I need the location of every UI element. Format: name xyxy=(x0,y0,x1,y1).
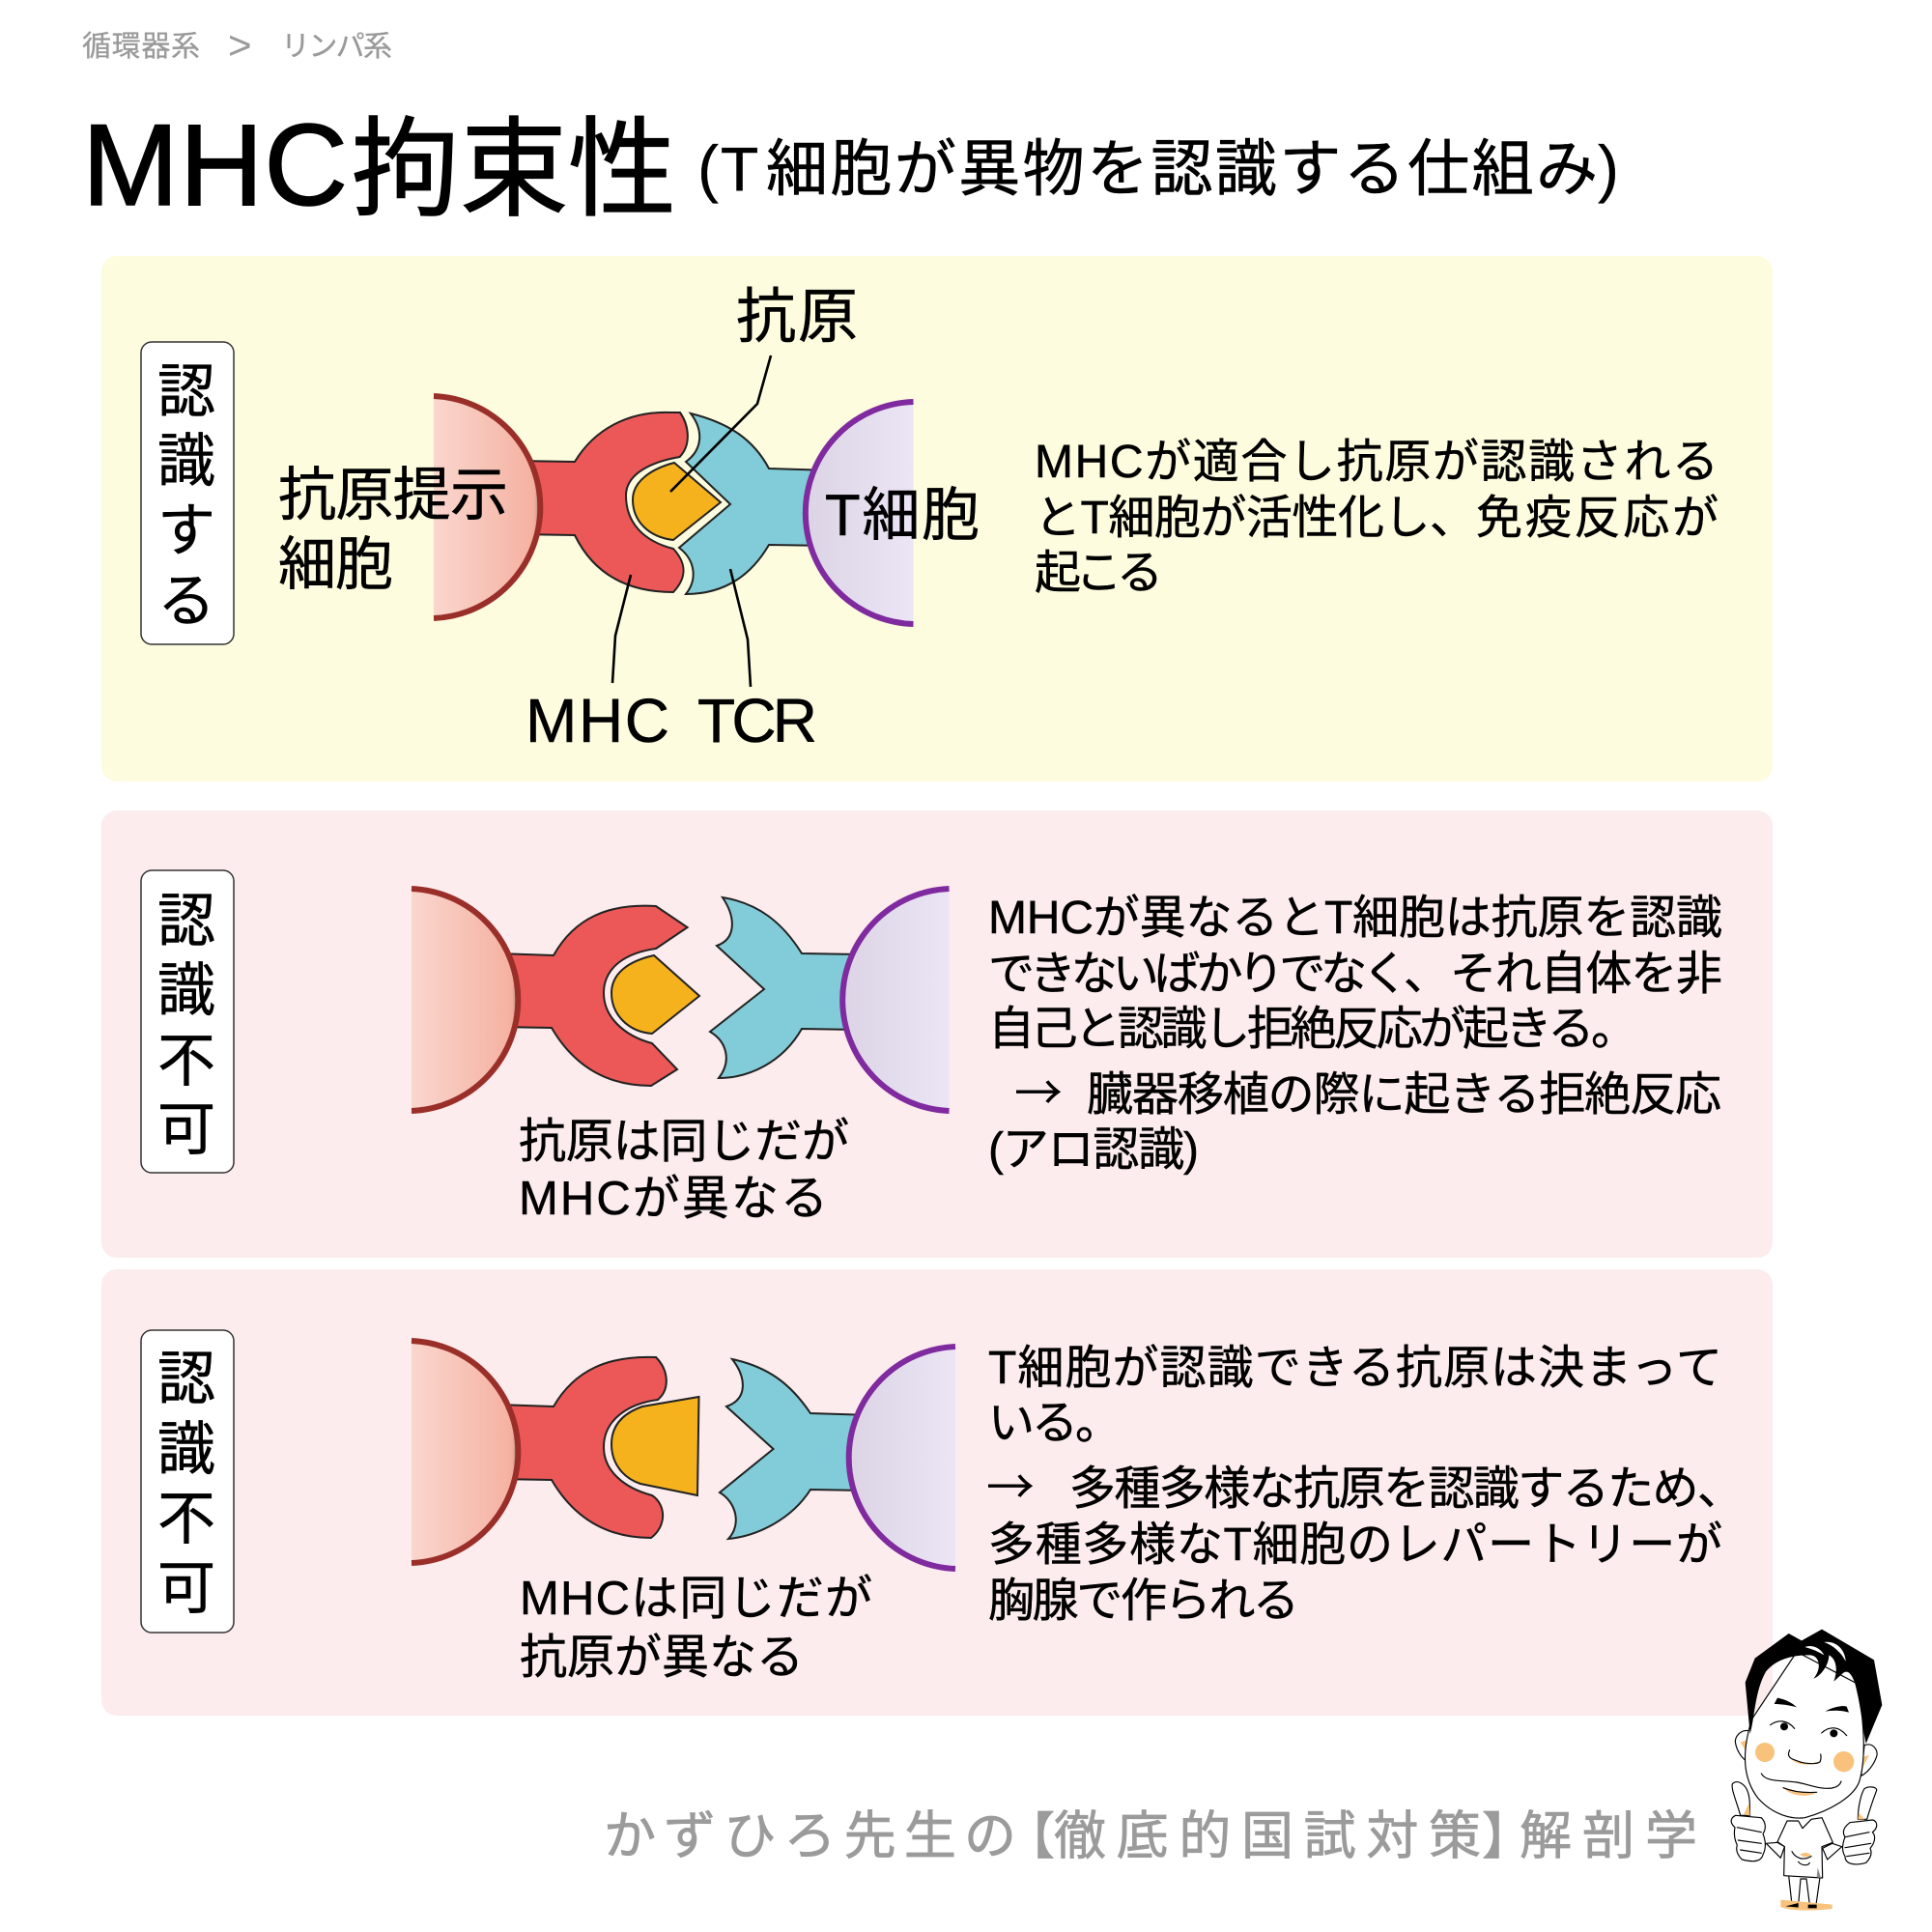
mascot ears xyxy=(1735,1730,1877,1776)
label: 認識する: 識 xyxy=(157,429,215,494)
label: 認識する xyxy=(141,342,234,644)
panel: different MHC xyxy=(101,810,1773,1258)
caption: 抗原は同じだが xyxy=(519,1116,849,1168)
caption xyxy=(519,1116,849,1225)
label: 認識不可: 不 xyxy=(157,1487,215,1551)
caption: MHCは同じだが xyxy=(520,1573,872,1625)
label: antigen presenting cell xyxy=(278,463,508,597)
mascot body xyxy=(1766,1818,1842,1911)
description: いる。 xyxy=(988,1398,1122,1449)
label: 認識不可 xyxy=(141,870,234,1173)
description: できないばかりでなく、 xyxy=(988,949,1450,1000)
subtitle: ( xyxy=(697,132,719,204)
label: MHC: MHC xyxy=(526,686,669,755)
diagram: mismatch of antigen xyxy=(412,1341,955,1569)
title kanji: 拘束性 xyxy=(352,109,676,230)
footer credit: かずひろ先生の xyxy=(604,1807,1016,1865)
mascot face xyxy=(1746,1652,1863,1818)
footer credit: 徹底的国試対策 xyxy=(1054,1807,1481,1865)
description: MHCが適合し抗原が認識される xyxy=(1035,437,1719,488)
description: (アロ認識) xyxy=(988,1124,1199,1176)
description: MHCが異なるとT細胞は抗原を認識 xyxy=(988,893,1722,944)
label: 認識不可: 可 xyxy=(157,1556,215,1621)
footer credit: 】 xyxy=(1482,1809,1532,1865)
label: 認識する: る xyxy=(157,569,215,634)
panel: different antigen xyxy=(101,1269,1773,1716)
description: 自己と認識し拒絶反応が起きる。 xyxy=(988,1004,1637,1055)
description: それ自体を非 xyxy=(1450,949,1722,1000)
label: TCR: TCR xyxy=(697,686,817,755)
description: T細胞が認識できる抗原は決まって xyxy=(988,1343,1722,1394)
diagram: MHC and TCR bound xyxy=(434,396,914,624)
description: → xyxy=(986,1449,1035,1519)
panel: recognised xyxy=(101,256,1773,781)
caption: 抗原が異なる xyxy=(520,1632,804,1684)
label: 認識不可 xyxy=(141,1330,234,1633)
label: antigen presenting cell: 細胞 xyxy=(278,532,393,597)
description: → xyxy=(1014,1055,1063,1124)
label: 認識不可: 不 xyxy=(157,1029,215,1094)
subtitle: ) xyxy=(1598,132,1619,204)
description: とT細胞が活性化し、 xyxy=(1035,493,1476,544)
label: antigen presenting cell: 抗原提示 xyxy=(278,463,508,527)
label: 認識不可: 認 xyxy=(157,1347,215,1411)
description: 胸腺で作られる xyxy=(988,1576,1299,1627)
mascot features xyxy=(1755,1698,1854,1796)
title: MHC xyxy=(82,100,348,230)
description: 免疫反応が xyxy=(1476,493,1719,544)
description: 多種多様なT細胞のレパートリーが xyxy=(988,1520,1722,1571)
icon: doctor mascot xyxy=(1731,1630,1882,1911)
caption xyxy=(520,1573,872,1684)
description xyxy=(986,1343,1744,1627)
diagram: mismatch of MHC xyxy=(412,889,949,1111)
caption: MHCが異なる xyxy=(519,1173,828,1225)
breadcrumb: リンパ系 xyxy=(281,31,392,63)
footer credit xyxy=(604,1807,1697,1865)
mascot hair xyxy=(1746,1630,1882,1744)
description: 多種多様な抗原を認識するため、 xyxy=(1069,1463,1744,1515)
label: T cell: T細胞 xyxy=(825,483,980,548)
breadcrumb: 循環器系 xyxy=(82,31,200,63)
label: antigen: 抗原 xyxy=(736,284,858,351)
description: 臓器移植の際に起きる拒絶反応 xyxy=(1087,1069,1721,1121)
footer credit: 【 xyxy=(1005,1809,1055,1865)
label: 認識不可: 可 xyxy=(157,1097,215,1162)
description xyxy=(1035,437,1719,599)
description xyxy=(988,893,1722,1176)
label: 認識する: す xyxy=(157,498,215,563)
description: 起こる xyxy=(1035,548,1163,599)
breadcrumb: > xyxy=(228,22,252,68)
label: 認識する: 認 xyxy=(157,359,215,424)
mascot left hand thumb up xyxy=(1731,1782,1765,1861)
leader lines xyxy=(612,355,771,687)
subtitle: T xyxy=(721,134,758,204)
breadcrumb xyxy=(82,22,392,68)
mascot right hand thumb up xyxy=(1842,1787,1877,1864)
label: 認識不可: 認 xyxy=(157,889,215,953)
mascot hair highlights xyxy=(1804,1642,1846,1662)
label: 認識不可: 識 xyxy=(157,958,215,1023)
label: 認識不可: 識 xyxy=(157,1417,215,1482)
footer credit: 解剖学 xyxy=(1520,1807,1697,1865)
subtitle: 細胞が異物を認識する仕組み xyxy=(766,134,1598,204)
